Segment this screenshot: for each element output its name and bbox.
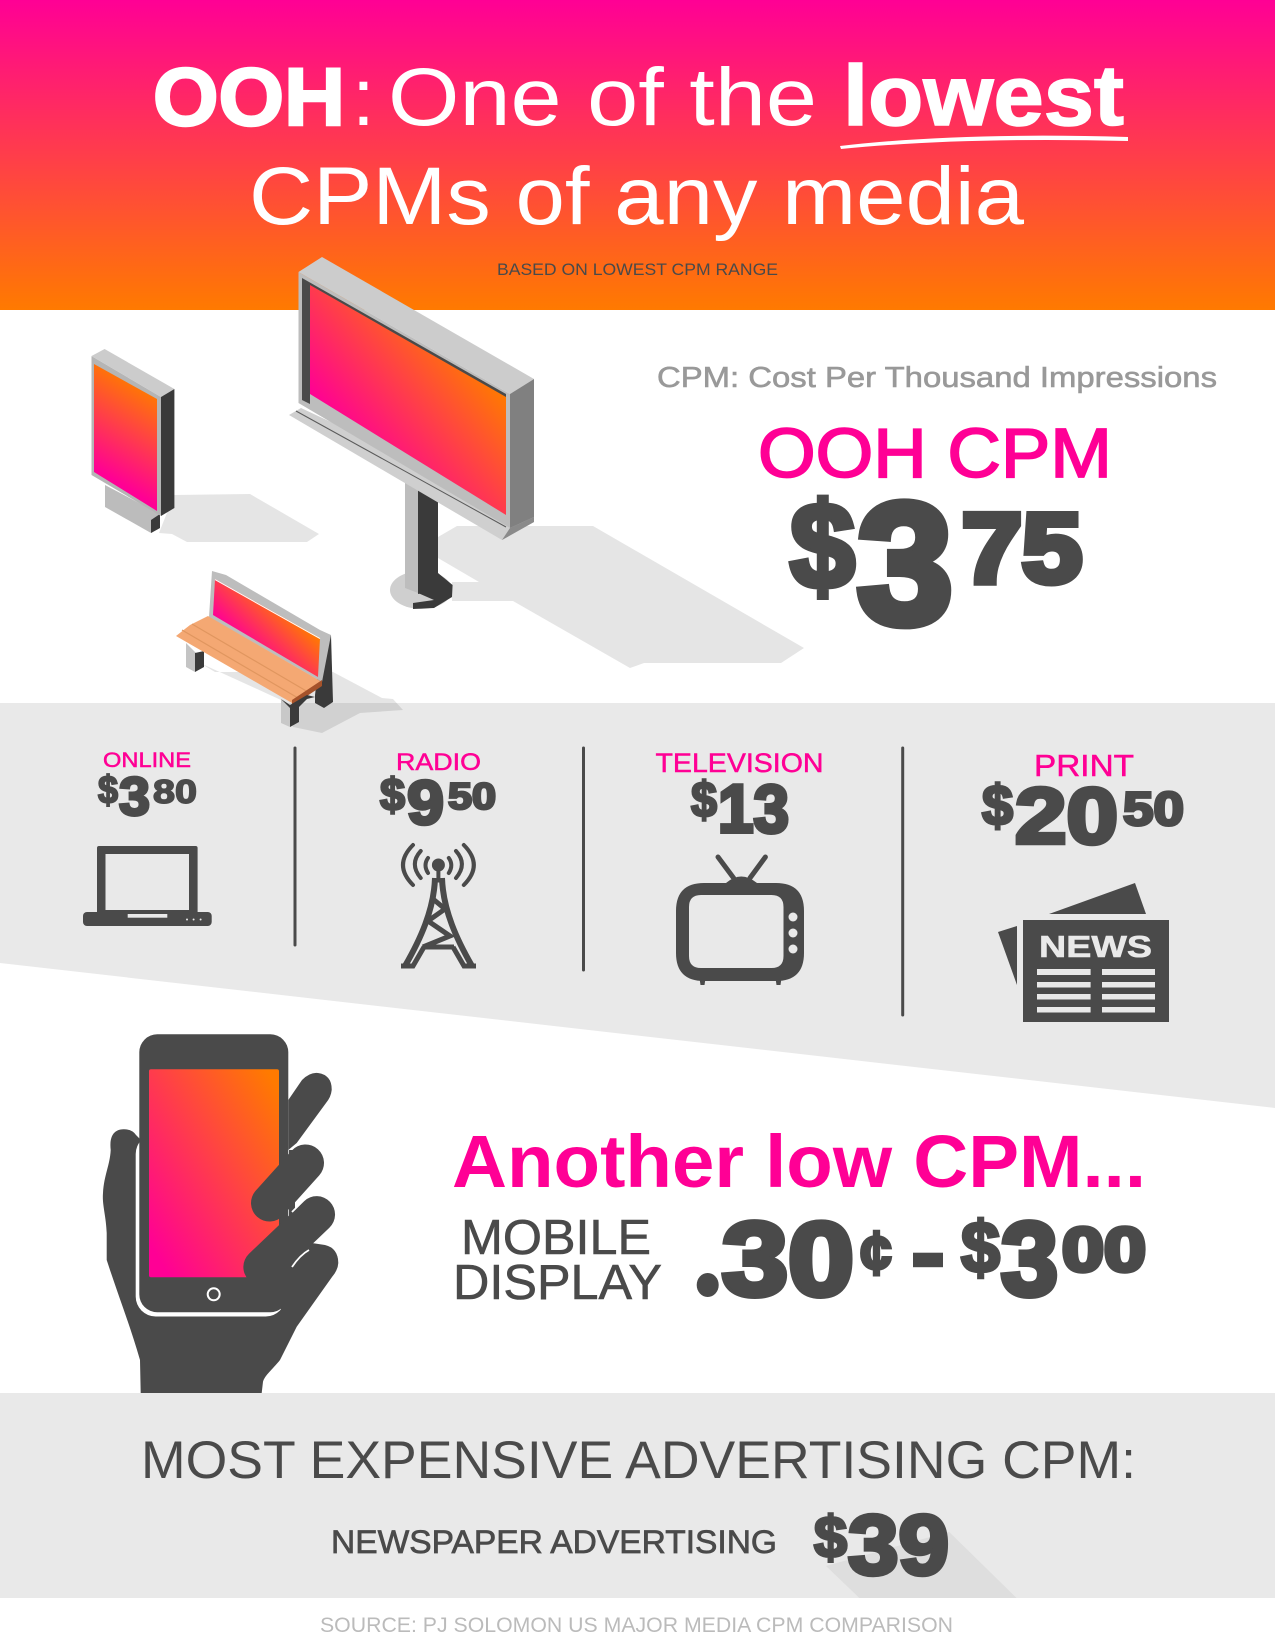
price: online: 80 xyxy=(153,773,197,810)
price: print xyxy=(982,771,1184,860)
screen xyxy=(310,285,506,515)
title xyxy=(153,49,1124,242)
phone screen xyxy=(149,1069,279,1277)
price: newspaper $39 xyxy=(814,1498,1017,1598)
heading: another low CPM: Another low CPM... xyxy=(452,1120,1146,1203)
price range: mobile: $ xyxy=(961,1208,1000,1288)
price: OOH $3.75: $ xyxy=(790,478,855,614)
icon: laptop xyxy=(83,846,212,926)
header band xyxy=(0,0,1275,310)
label: mobile display: DISPLAY xyxy=(453,1256,662,1310)
icon: television xyxy=(676,857,804,985)
title: OOH xyxy=(153,52,345,143)
grey media band xyxy=(0,703,1275,1108)
shadow: large billboard xyxy=(438,526,804,668)
phone body xyxy=(139,1034,288,1312)
panel: online xyxy=(83,749,212,926)
phone home button xyxy=(208,1288,220,1300)
index finger xyxy=(288,1073,332,1150)
icon: newspaper xyxy=(998,883,1169,1022)
price: radio xyxy=(380,769,496,838)
ledge xyxy=(289,408,534,540)
price: radio: $ xyxy=(380,769,405,820)
price: television: $ xyxy=(691,772,717,828)
title: : xyxy=(352,52,375,143)
label: radio: RADIO xyxy=(396,749,481,776)
heading: OOH CPM: OOH CPM xyxy=(758,414,1112,492)
small billboard xyxy=(92,349,174,533)
large billboard xyxy=(289,257,534,609)
price: print: $ xyxy=(982,774,1013,838)
title: CPMs of any media xyxy=(249,151,1024,242)
shadow: bench xyxy=(200,663,403,733)
price: television: 13 xyxy=(718,771,789,847)
icon: radio tower xyxy=(401,845,476,966)
price: newspaper $39: 39 xyxy=(848,1498,949,1592)
shadow: small billboard xyxy=(159,494,319,542)
price: print: 20 xyxy=(1015,771,1118,860)
heading: most expensive advertising CPM: MOST EXPENSIVE ADVERTISING CPM: xyxy=(141,1431,1136,1490)
phone outline gap xyxy=(136,1134,286,1316)
label: mobile display xyxy=(453,1211,662,1310)
price: print: 50 xyxy=(1123,782,1184,835)
price: radio: 9 xyxy=(407,769,444,838)
price: television xyxy=(691,771,789,847)
icon: newspaper: NEWS xyxy=(1039,929,1152,964)
label: online: ONLINE xyxy=(103,749,191,772)
price range: mobile: ¢ xyxy=(860,1219,892,1288)
title: One of the xyxy=(388,52,817,143)
icon: hand holding phone xyxy=(103,1034,338,1393)
pole xyxy=(390,480,453,609)
title: lowest xyxy=(843,49,1124,144)
price: online xyxy=(98,767,197,827)
illustration: billboards and bench xyxy=(92,257,804,733)
label: newspaper advertising: NEWSPAPER ADVERTISING xyxy=(331,1524,777,1560)
title underline xyxy=(840,136,1128,149)
frame xyxy=(298,272,510,528)
price: OOH $3.75: 3 xyxy=(857,468,953,660)
grey footer band xyxy=(0,1393,1275,1598)
fingers xyxy=(262,1140,322,1310)
panel: television xyxy=(656,748,824,985)
price: online: 3 xyxy=(119,767,150,827)
bench xyxy=(176,571,333,727)
price: newspaper $39: $ xyxy=(814,1505,847,1570)
price: OOH $3.75 xyxy=(790,468,1082,660)
price: online: $ xyxy=(98,769,118,812)
label: mobile display: MOBILE xyxy=(461,1211,651,1265)
label: television: TELEVISION xyxy=(656,748,824,778)
panel: print xyxy=(982,748,1184,1022)
price range: mobile: 00 xyxy=(1062,1216,1146,1285)
price range: mobile xyxy=(697,1202,1146,1318)
price range: mobile: 30 xyxy=(722,1202,854,1318)
text: CPM definition: CPM: Cost Per Thousand Impressions xyxy=(657,362,1217,394)
subtitle: based on lowest CPM range: BASED ON LOWEST CPM RANGE xyxy=(497,261,778,279)
price: OOH $3.75: 75 xyxy=(962,493,1082,603)
label: print: PRINT xyxy=(1034,748,1134,783)
panel: radio xyxy=(380,749,496,966)
price range: mobile: 3 xyxy=(1001,1202,1058,1318)
divider lines xyxy=(295,748,903,1015)
price: radio: 50 xyxy=(448,776,496,817)
hand palm xyxy=(103,1129,338,1393)
